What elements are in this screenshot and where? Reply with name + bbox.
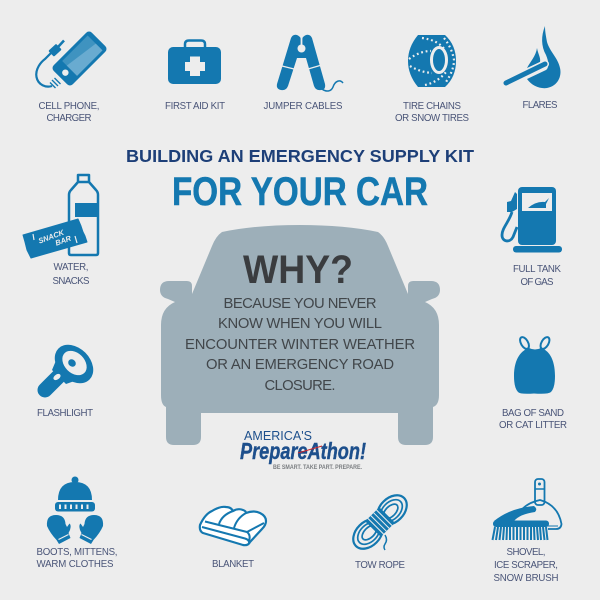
icon: gas pump bbox=[502, 187, 562, 252]
logo: America's PrepareAthon: AMERICA'S bbox=[244, 429, 312, 443]
heading: why: WHY? bbox=[243, 248, 353, 292]
icon: cell phone bbox=[36, 30, 108, 88]
icon: water bottle and snack bar: SNACK bbox=[37, 228, 66, 245]
label: tow rope: TOW ROPE bbox=[355, 560, 406, 571]
heading: building an emergency supply kit: BUILDING AN EMERGENCY SUPPLY KIT bbox=[126, 146, 474, 166]
text: because explanation: ENCOUNTER WINTER WEATHER bbox=[185, 337, 415, 353]
item: flares bbox=[506, 26, 560, 111]
label: shovel, ice scraper, snow brush: ICE SCRAPER, bbox=[494, 560, 558, 571]
car with why text bbox=[160, 225, 440, 445]
item: water, snacks bbox=[23, 175, 99, 287]
text: because explanation: KNOW WHEN YOU WILL bbox=[218, 316, 382, 332]
label: flares: FLARES bbox=[522, 100, 558, 111]
icon: tire with chains bbox=[408, 35, 456, 87]
label: cell phone, charger: CHARGER bbox=[46, 113, 92, 124]
label: boots, mittens, warm clothes: WARM CLOTHES bbox=[36, 559, 114, 570]
label: bag of sand or cat litter: OR CAT LITTER bbox=[499, 420, 567, 431]
item: flashlight bbox=[37, 337, 101, 419]
text: because explanation: OR AN EMERGENCY ROAD bbox=[206, 357, 394, 373]
label: bag of sand or cat litter: BAG OF SAND bbox=[502, 408, 564, 419]
icon: first aid kit bbox=[168, 40, 221, 84]
title: for your car: FOR YOUR CAR bbox=[172, 170, 428, 214]
item: cell phone, charger bbox=[36, 30, 108, 124]
label: tire chains or snow tires: TIRE CHAINS bbox=[403, 101, 462, 112]
icon: water bottle and snack bar: BAR bbox=[54, 233, 73, 248]
label: water, snacks: WATER, bbox=[54, 262, 88, 273]
car silhouette bbox=[160, 225, 440, 445]
text: because explanation: CLOSURE. bbox=[264, 378, 336, 394]
item: blanket bbox=[200, 507, 266, 570]
icon: shovel, scraper and brush bbox=[492, 479, 562, 540]
item: boots, mittens, warm clothes bbox=[36, 476, 118, 570]
label: boots, mittens, warm clothes: BOOTS, MITTENS, bbox=[36, 547, 118, 558]
text: because explanation: BECAUSE YOU NEVER bbox=[224, 296, 376, 312]
label: shovel, ice scraper, snow brush: SHOVEL, bbox=[506, 547, 546, 558]
label: water, snacks: SNACKS bbox=[52, 276, 90, 287]
logo: America's PrepareAthon: PrepareAthon! bbox=[240, 438, 366, 464]
icon: jumper cables bbox=[277, 35, 343, 91]
label: tire chains or snow tires: OR SNOW TIRES bbox=[395, 113, 470, 124]
label: flashlight: FLASHLIGHT bbox=[37, 408, 93, 419]
icon: flare and flame bbox=[506, 26, 560, 88]
icon: coiled rope bbox=[347, 489, 413, 555]
icon: flashlight bbox=[45, 337, 101, 391]
label: cell phone, charger: CELL PHONE, bbox=[38, 101, 100, 112]
icon: folded blanket bbox=[200, 507, 266, 545]
item: tire chains bbox=[395, 35, 470, 124]
icon: hat and mittens bbox=[47, 476, 103, 544]
item: first aid kit bbox=[165, 40, 225, 112]
logo: America's PrepareAthon bbox=[240, 429, 366, 471]
logo: America's PrepareAthon: BE SMART. TAKE PART. PREPARE. bbox=[273, 464, 362, 471]
label: full tank of gas: FULL TANK bbox=[513, 264, 562, 275]
label: shovel, ice scraper, snow brush: SNOW BRUSH bbox=[494, 573, 558, 584]
item: tow rope bbox=[347, 489, 413, 571]
icon: water bottle and snack bar bbox=[23, 175, 99, 258]
item: full tank of gas bbox=[502, 187, 562, 288]
label: full tank of gas: OF GAS bbox=[520, 277, 554, 288]
icon: tied bag bbox=[514, 336, 555, 394]
label: first aid kit: FIRST AID KIT bbox=[165, 101, 225, 112]
label: jumper cables: JUMPER CABLES bbox=[264, 101, 343, 112]
item: jumper cables bbox=[264, 35, 343, 112]
label: blanket: BLANKET bbox=[212, 559, 254, 570]
item: shovel, ice scraper, snow brush bbox=[492, 479, 562, 584]
item: bag of sand or cat litter bbox=[499, 336, 567, 431]
